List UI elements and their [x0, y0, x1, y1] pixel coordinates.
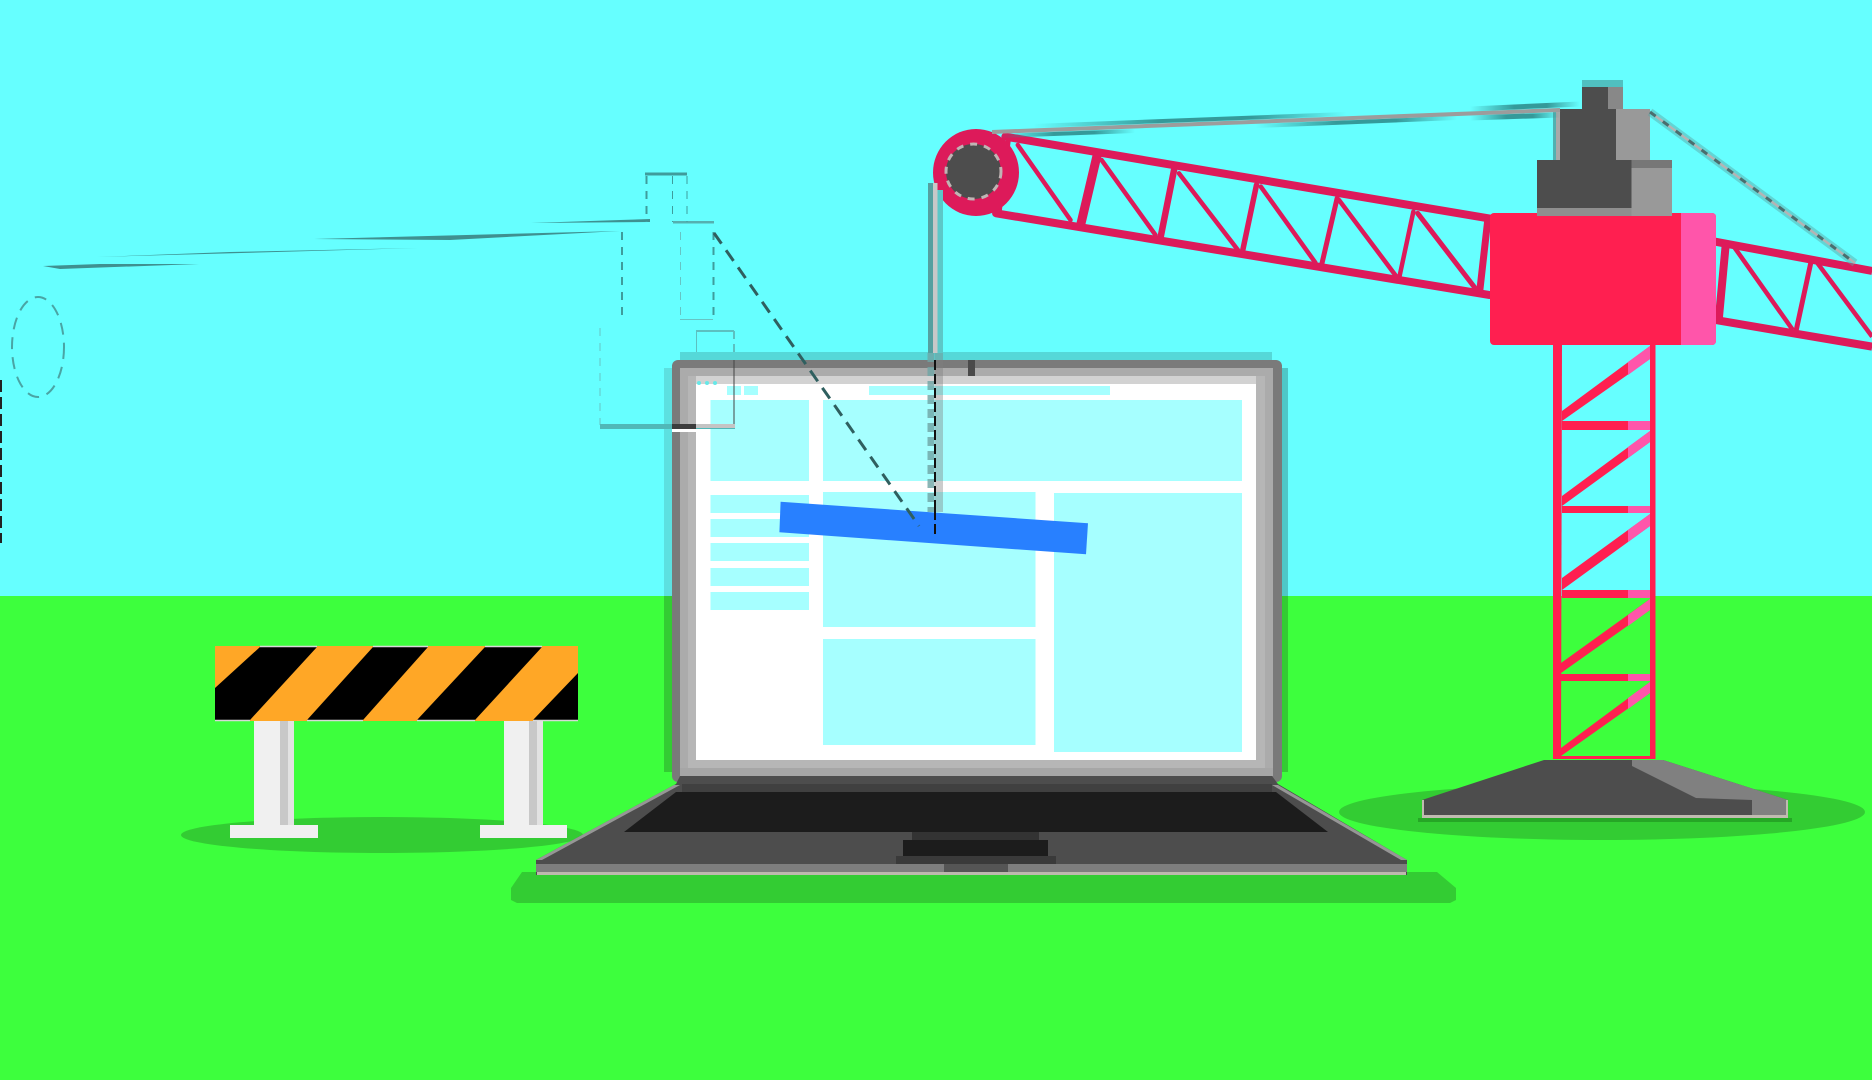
- laptop base: [536, 776, 1407, 875]
- ghost pulley: [12, 297, 64, 397]
- right boom truss: [1715, 242, 1872, 347]
- window dots: [697, 381, 717, 385]
- ground: [0, 596, 1872, 1080]
- shadow: barrier: [181, 817, 583, 853]
- tower rungs: [1561, 346, 1650, 759]
- laptop hinge mark: [968, 360, 975, 376]
- hoisted blue beam: [779, 502, 1088, 554]
- ghost counterweight: [600, 174, 734, 425]
- pulley wheel: [933, 129, 1019, 216]
- laptop halo: [664, 352, 1288, 772]
- tower highlight: [1628, 346, 1650, 709]
- diagonal hoist cable: [714, 233, 919, 526]
- toolbar: [727, 386, 1110, 395]
- laptop lid: [672, 360, 1282, 782]
- barrier board: [215, 646, 578, 721]
- ghost edge cable: [0, 380, 2, 543]
- tower verticals: [1553, 345, 1656, 759]
- top cable: [992, 104, 1580, 136]
- shadow: crane: [1339, 784, 1865, 840]
- sky background: [0, 0, 1872, 597]
- operator cabin: [1490, 213, 1716, 345]
- left boom truss: [996, 137, 1492, 295]
- hook cable vertical: [928, 183, 943, 536]
- mast head: [1537, 80, 1672, 216]
- ghost crane outline: [1, 174, 734, 543]
- laptop: [536, 352, 1407, 875]
- crane base: [1418, 760, 1792, 822]
- laptop screen: [696, 381, 1256, 760]
- back stay cable: [1650, 112, 1855, 263]
- crane: [933, 80, 1872, 822]
- hook cable over beam: [934, 510, 936, 536]
- ghost box overlay on lid: [600, 360, 735, 432]
- page layout blocks: [710, 400, 1242, 752]
- lattice tower: [1553, 345, 1656, 759]
- shadow: laptop: [511, 872, 1456, 903]
- barrier left leg: [230, 721, 318, 838]
- barrier right leg: [480, 721, 567, 838]
- barrier: [215, 646, 578, 838]
- ghost cable: [43, 219, 714, 269]
